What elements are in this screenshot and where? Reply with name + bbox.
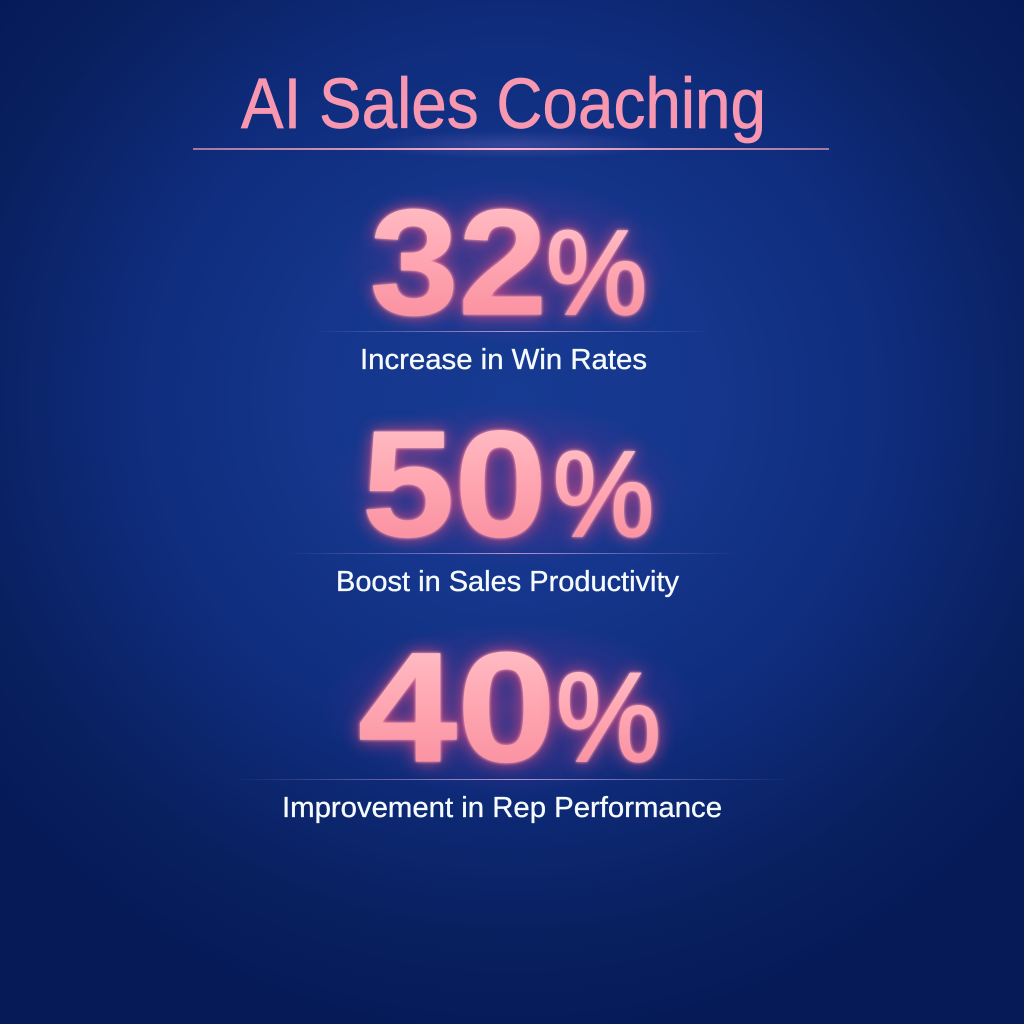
heading: AI Sales Coaching <box>241 65 766 144</box>
label: sales productivity: Boost in Sales Productivity <box>336 566 679 598</box>
title underline <box>193 148 829 150</box>
stat: 50 percent <box>287 399 737 598</box>
stat: 50 percent: % <box>553 426 654 562</box>
stat: 32 percent: 32 <box>370 178 547 346</box>
label: rep performance: Improvement in Rep Performance <box>282 792 722 824</box>
title block <box>193 65 829 159</box>
stat: 40 percent: 40 <box>358 621 556 795</box>
stat: 40 percent <box>232 621 792 824</box>
stat: 32 percent: % <box>546 206 647 340</box>
stat: 40 percent: % <box>556 647 661 788</box>
label: win rates: Increase in Win Rates <box>360 344 647 376</box>
stat: 32 percent <box>312 178 712 376</box>
title glow <box>362 131 662 159</box>
stat: 50 percent: 50 <box>362 399 547 568</box>
